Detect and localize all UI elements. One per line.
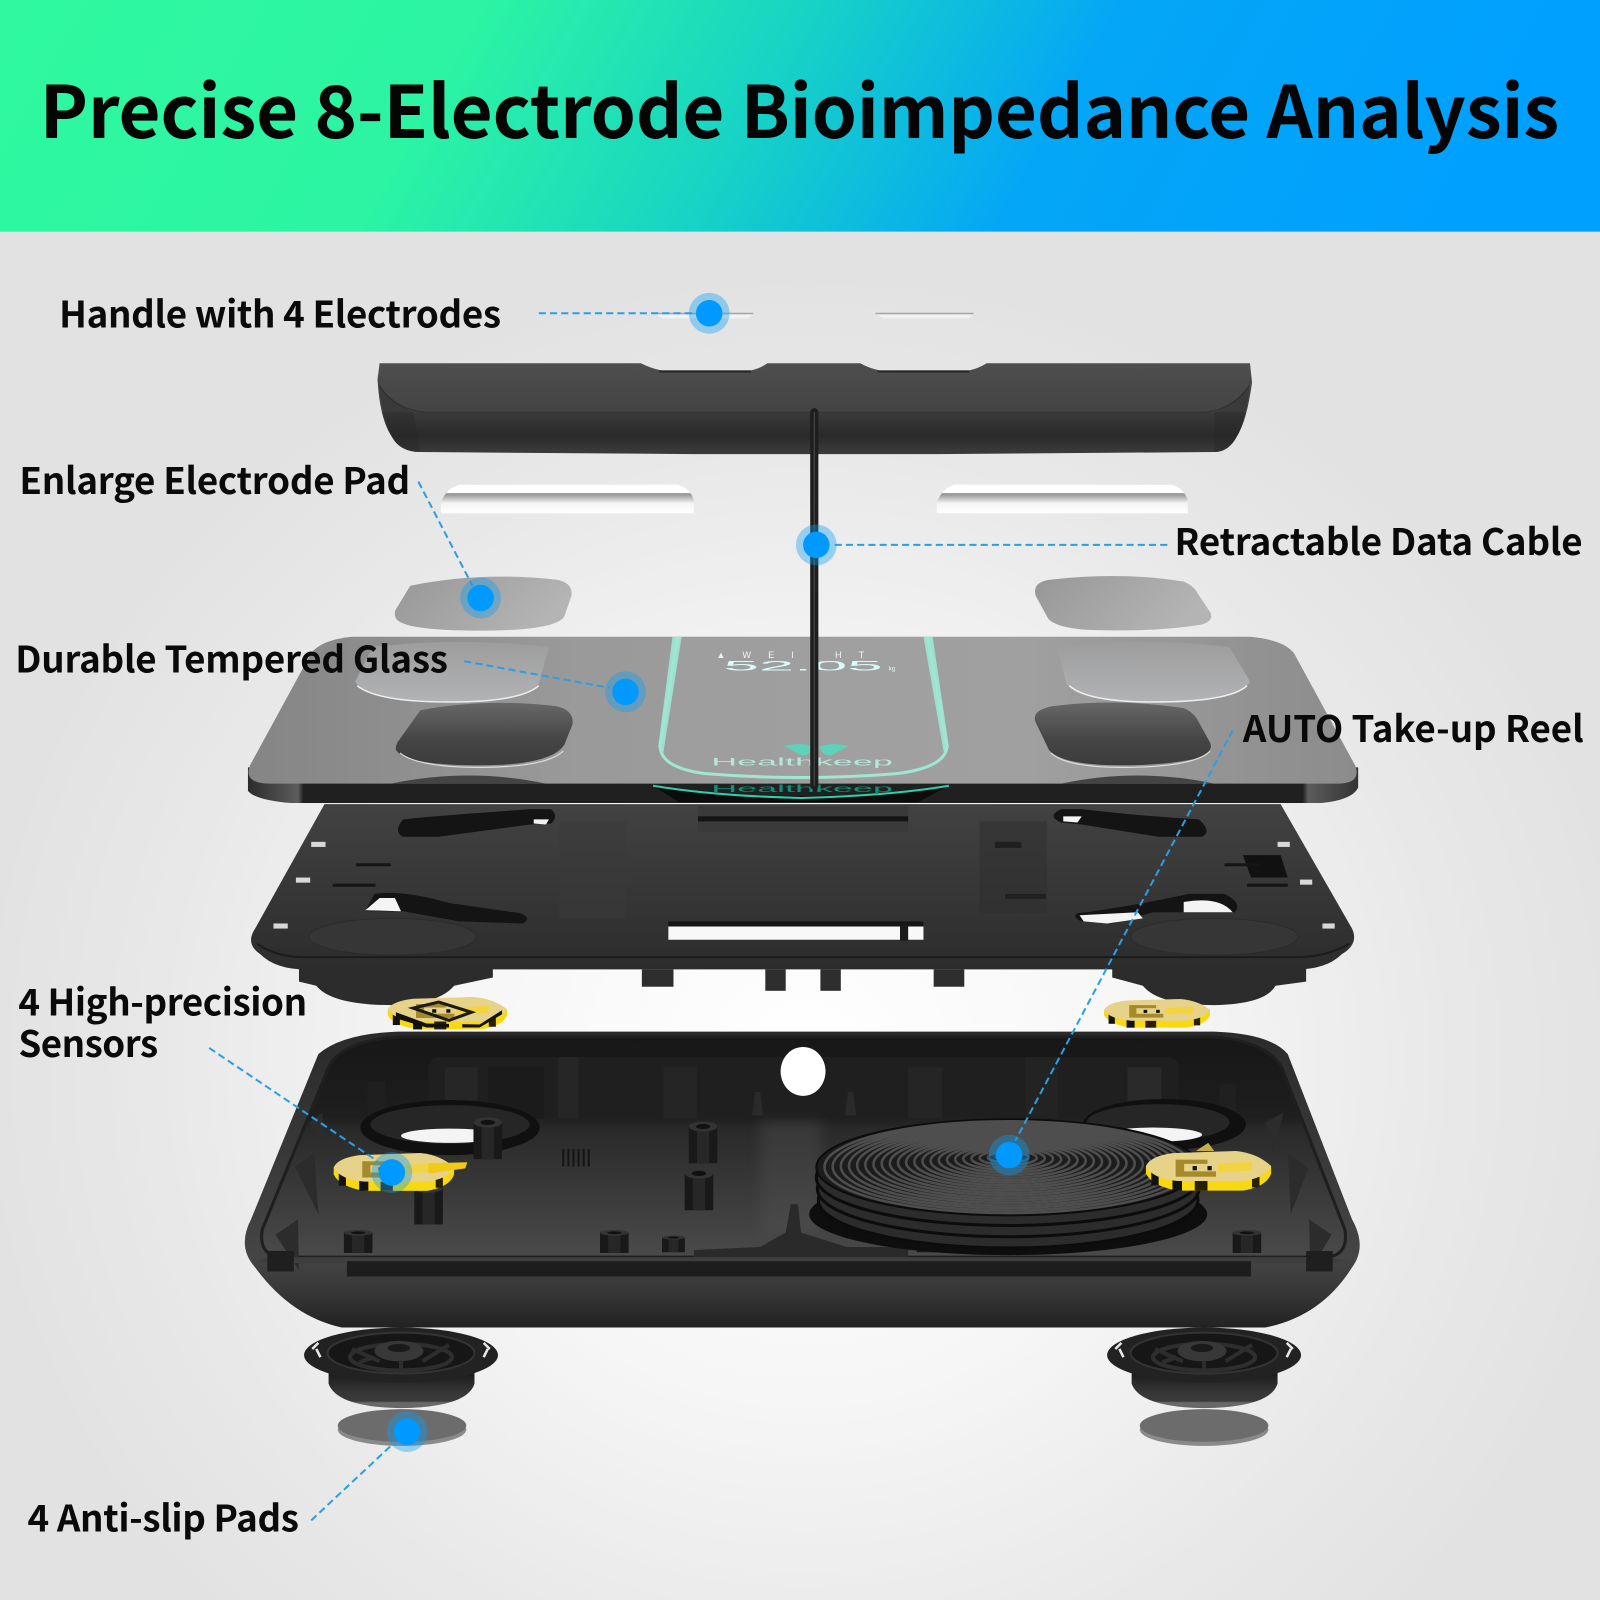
take-up reel coil — [809, 1119, 1207, 1255]
base interior floor — [262, 1037, 1346, 1257]
frame slots — [273, 806, 1335, 955]
standoff posts — [344, 1117, 1261, 1253]
cable exit hole — [781, 1047, 826, 1096]
label: electrode pad: Enlarge Electrode Pad — [19, 451, 410, 505]
title: Precise 8-Electrode Bioimpedance Analysis — [40, 54, 1559, 159]
load sensors above base — [388, 997, 1210, 1029]
back wall detail — [367, 1057, 1236, 1118]
connector block — [694, 1204, 908, 1257]
callout markers — [371, 293, 1030, 1452]
label: sensors: Sensors — [18, 1014, 158, 1068]
left foot — [304, 1328, 498, 1408]
logo foot icon — [784, 744, 849, 755]
glass plate — [248, 637, 1358, 803]
label: sensors — [18, 972, 307, 1068]
handle electrodes: thin top plates — [655, 313, 973, 318]
sensors inside base — [334, 1143, 1271, 1191]
label: data cable: Retractable Data Cable — [1174, 512, 1583, 566]
leader lines — [209, 313, 1233, 1520]
label: take-up reel: AUTO Take-up Reel — [1242, 699, 1584, 753]
label: tempered glass: Durable Tempered Glass — [15, 629, 448, 683]
enlarged electrode pads: white upper plates — [441, 485, 1188, 513]
centre teal band: Healthkeep — [711, 756, 893, 768]
left anti-slip pad — [338, 1409, 466, 1446]
mid frame plate — [251, 804, 1354, 1005]
light streak below hole — [760, 1120, 821, 1233]
label: sensors: 4 High-precision — [18, 972, 307, 1026]
label: handle electrodes: Handle with 4 Electrodes — [59, 285, 501, 339]
retractable data cable — [810, 412, 818, 786]
header banner — [0, 0, 1600, 232]
side windows — [267, 1251, 1333, 1271]
handle body — [378, 363, 1252, 454]
right anti-slip pad — [1140, 1409, 1268, 1446]
front lip — [257, 1257, 1347, 1263]
centre teal band: kg — [889, 665, 895, 672]
enlarged electrode pads: grey lower plates — [395, 576, 1211, 631]
right foot — [1107, 1328, 1301, 1408]
side clips — [276, 1112, 1332, 1270]
left load ring — [360, 1100, 540, 1155]
centre teal band: 52.05 — [723, 658, 883, 674]
vent lines — [563, 1149, 589, 1166]
display readout: ▲WEIGHT — [716, 650, 865, 660]
base housing — [245, 1032, 1360, 1328]
centre teal band — [653, 637, 949, 802]
label: anti-slip pads: 4 Anti-slip Pads — [28, 1489, 299, 1543]
centre teal band: Healthkeep — [711, 784, 894, 795]
front dark bar — [347, 1261, 1251, 1277]
right load ring — [1083, 1099, 1246, 1150]
frame feet and tabs — [299, 967, 1306, 1005]
glass electrode pads — [355, 642, 1250, 784]
